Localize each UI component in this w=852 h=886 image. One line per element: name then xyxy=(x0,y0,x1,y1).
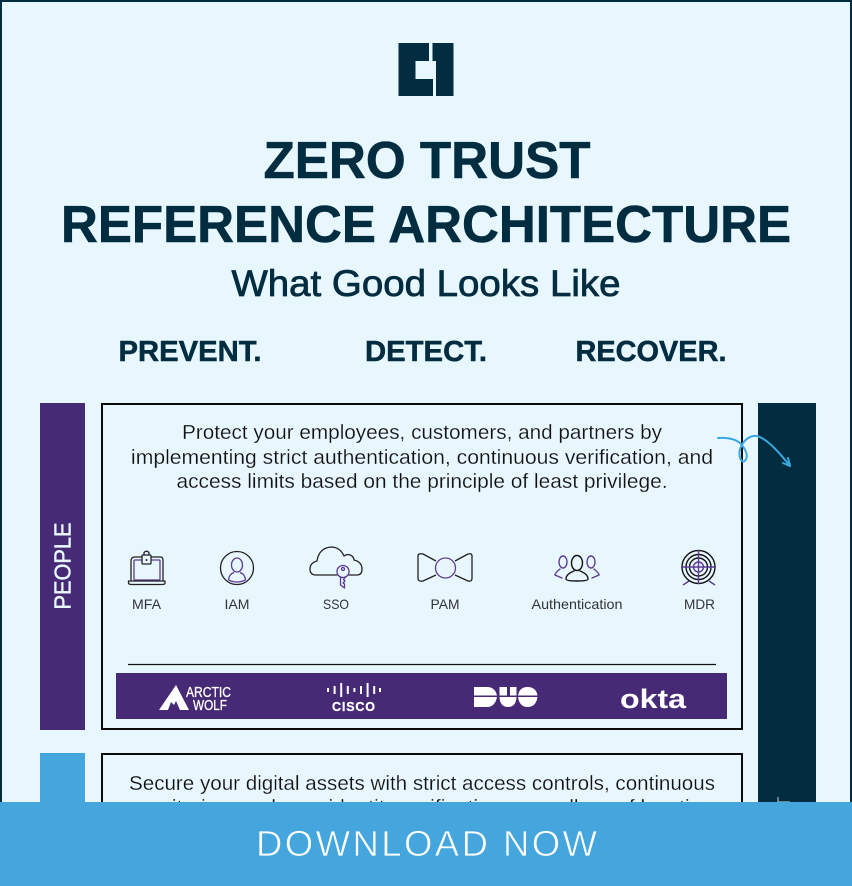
people description: implementing strict authentication, continuous verification, and xyxy=(131,447,713,469)
icon: MDR xyxy=(681,550,716,585)
logo: Duo xyxy=(474,687,538,707)
logo: Arctic Wolf: ARCTIC xyxy=(186,685,231,701)
people description: access limits based on the principle of least privilege. xyxy=(176,471,668,493)
prevent detect recover headings xyxy=(118,336,726,368)
logo: Arctic Wolf: WOLF xyxy=(193,698,227,714)
people description xyxy=(131,422,713,493)
panel: data xyxy=(102,754,742,824)
panel: data side label xyxy=(40,753,85,813)
prevent detect recover headings: DETECT. xyxy=(365,336,487,368)
download banner: DOWNLOAD NOW xyxy=(256,823,598,864)
icon: IAM xyxy=(220,552,254,584)
arrow: looping curl xyxy=(718,436,790,466)
title: REFERENCE ARCHITECTURE xyxy=(61,196,791,254)
logo: Cisco xyxy=(328,683,380,714)
data description: Secure your digital assets with strict access controls, continuous xyxy=(129,773,715,795)
people description: Protect your employees, customers, and partners by xyxy=(182,422,662,444)
panel: people xyxy=(102,404,742,729)
panel: dark right column xyxy=(758,403,816,823)
icon: Authentication xyxy=(555,556,599,581)
icon: SSO xyxy=(310,547,362,588)
vendor logo band xyxy=(116,673,727,719)
arrow stub in dark column xyxy=(778,797,790,803)
logo xyxy=(398,43,454,96)
logo: Cisco: CISCO xyxy=(332,700,375,714)
prevent detect recover headings: PREVENT. xyxy=(118,336,262,368)
label MDR: MDR xyxy=(684,596,715,612)
panel: people side label xyxy=(40,403,85,730)
data description: monitoring, and zero identity verification, regardless of location xyxy=(131,797,713,819)
title: ZERO TRUST xyxy=(264,132,591,190)
panel: people side label: PEOPLE xyxy=(50,522,76,610)
label PAM: PAM xyxy=(430,596,460,612)
icon: MFA xyxy=(128,551,165,584)
label IAM: IAM xyxy=(224,596,250,612)
title xyxy=(61,132,791,254)
prevent detect recover headings: RECOVER. xyxy=(576,336,726,368)
data description xyxy=(129,773,715,819)
icon: PAM xyxy=(418,554,472,581)
label SSO: SSO xyxy=(323,596,349,612)
label MFA: MFA xyxy=(132,596,162,612)
label Authentication: Authentication xyxy=(532,596,622,612)
logo: Arctic Wolf xyxy=(159,685,231,714)
logo: Okta: okta xyxy=(620,684,687,714)
subtitle: What Good Looks Like xyxy=(232,263,620,304)
download banner xyxy=(0,802,852,886)
